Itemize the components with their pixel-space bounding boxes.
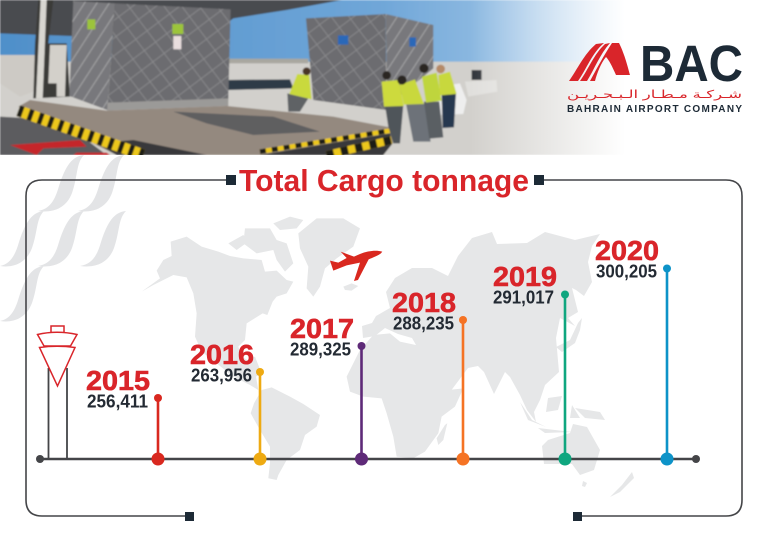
photo: container 1 front (107, 3, 231, 111)
photo: stripes right (260, 131, 390, 152)
photo: container 1 warning label (173, 36, 181, 49)
value 2016: 263,956 (191, 366, 252, 386)
header photo: cargo loading (0, 0, 768, 161)
photo: aircraft wing (0, 0, 342, 36)
map: iceland (343, 283, 358, 291)
year 2018: 2018 (392, 287, 456, 318)
year 2016: 2016 (190, 339, 254, 370)
title: Total Cargo tonnage (239, 163, 529, 198)
photo: worker 1 (287, 67, 312, 112)
logo english name: BAHRAIN AIRPORT COMPANY (567, 104, 742, 115)
photo: loader post (33, 0, 70, 98)
photo: apron ground (0, 62, 633, 155)
photo: white vehicle (437, 83, 467, 115)
value 2018: 288,235 (393, 314, 454, 334)
photo: horizon buildings (228, 59, 308, 63)
icon: plane (330, 251, 382, 281)
map: new zealand (582, 472, 634, 497)
photo: left dark ground (0, 117, 107, 155)
photo: white strut (36, 0, 47, 98)
photo: stripes left (18, 111, 143, 155)
value 2019: 291,017 (493, 288, 554, 308)
logo: BAC (567, 35, 743, 115)
icon: control tower (38, 326, 77, 459)
photo: deck dark panels (173, 112, 320, 135)
year 2017: 2017 (290, 313, 354, 344)
logo backdrop (625, 0, 768, 156)
photo: main deck (18, 100, 393, 155)
photo: red ground marking (10, 140, 110, 155)
map: japan (556, 318, 582, 352)
marker: 2016 (190, 339, 266, 466)
map: eurasia (362, 232, 600, 422)
photo: stripes left dark (18, 111, 143, 155)
photo: left post (48, 45, 67, 97)
photo: stripes right dark (260, 131, 390, 152)
marker: 2015 (86, 365, 164, 466)
photo: sky (0, 0, 633, 63)
map: madagascar (437, 423, 447, 445)
year 2019: 2019 (493, 261, 557, 292)
photo: left structure (0, 55, 35, 97)
photo: container 1 labels (87, 19, 183, 34)
timeline axis (36, 455, 700, 463)
map: arctic islands (228, 217, 303, 272)
map: greenland (298, 218, 360, 297)
map: australia (542, 424, 600, 475)
photo: container 2 front (306, 14, 387, 110)
marker: 2017 (290, 313, 368, 466)
photo: stripes lower right dark (327, 140, 392, 155)
tower legs (48, 368, 67, 459)
photo: container 1 base (107, 98, 228, 111)
photo: tug driver (472, 70, 482, 80)
photo: container 2 side (386, 14, 433, 107)
map: north america (142, 237, 293, 390)
value 2015: 256,411 (87, 392, 148, 412)
value 2017: 289,325 (290, 340, 351, 360)
marker: 2020 (595, 235, 674, 466)
marker: 2019 (493, 261, 572, 466)
frame square markers (185, 175, 582, 521)
photo: white fade to right (470, 0, 625, 156)
photo: worker 2 (382, 71, 404, 143)
photo: worker 5 (436, 65, 457, 128)
photo: stripes lower right (327, 140, 392, 155)
photo: container 2 blue labels (338, 35, 416, 47)
photo: tug vehicle (465, 80, 497, 97)
photo: deck dark front edge (97, 133, 393, 155)
background world map (142, 217, 634, 497)
logo mark (569, 43, 630, 81)
year 2020: 2020 (595, 235, 659, 266)
photo: worker 4 (419, 64, 443, 139)
rounded frame (26, 180, 742, 516)
year 2015: 2015 (86, 365, 150, 396)
map: south america (251, 387, 320, 480)
value 2020: 300,205 (596, 262, 657, 282)
photo: container 1 side (69, 1, 115, 110)
logo arabic name: شـركـة مـطـار الـبـحـريـن (567, 89, 742, 101)
decorative wave ribbons (0, 155, 126, 321)
photo: runway shadow (227, 79, 293, 90)
tower cap (38, 326, 77, 386)
photo: worker 3 (397, 75, 431, 142)
map: indonesia (520, 396, 605, 433)
photo: bottom clean edge (0, 155, 768, 161)
logo wordmark: BAC (640, 35, 743, 92)
marker: 2018 (392, 287, 470, 466)
map: africa (347, 333, 463, 458)
